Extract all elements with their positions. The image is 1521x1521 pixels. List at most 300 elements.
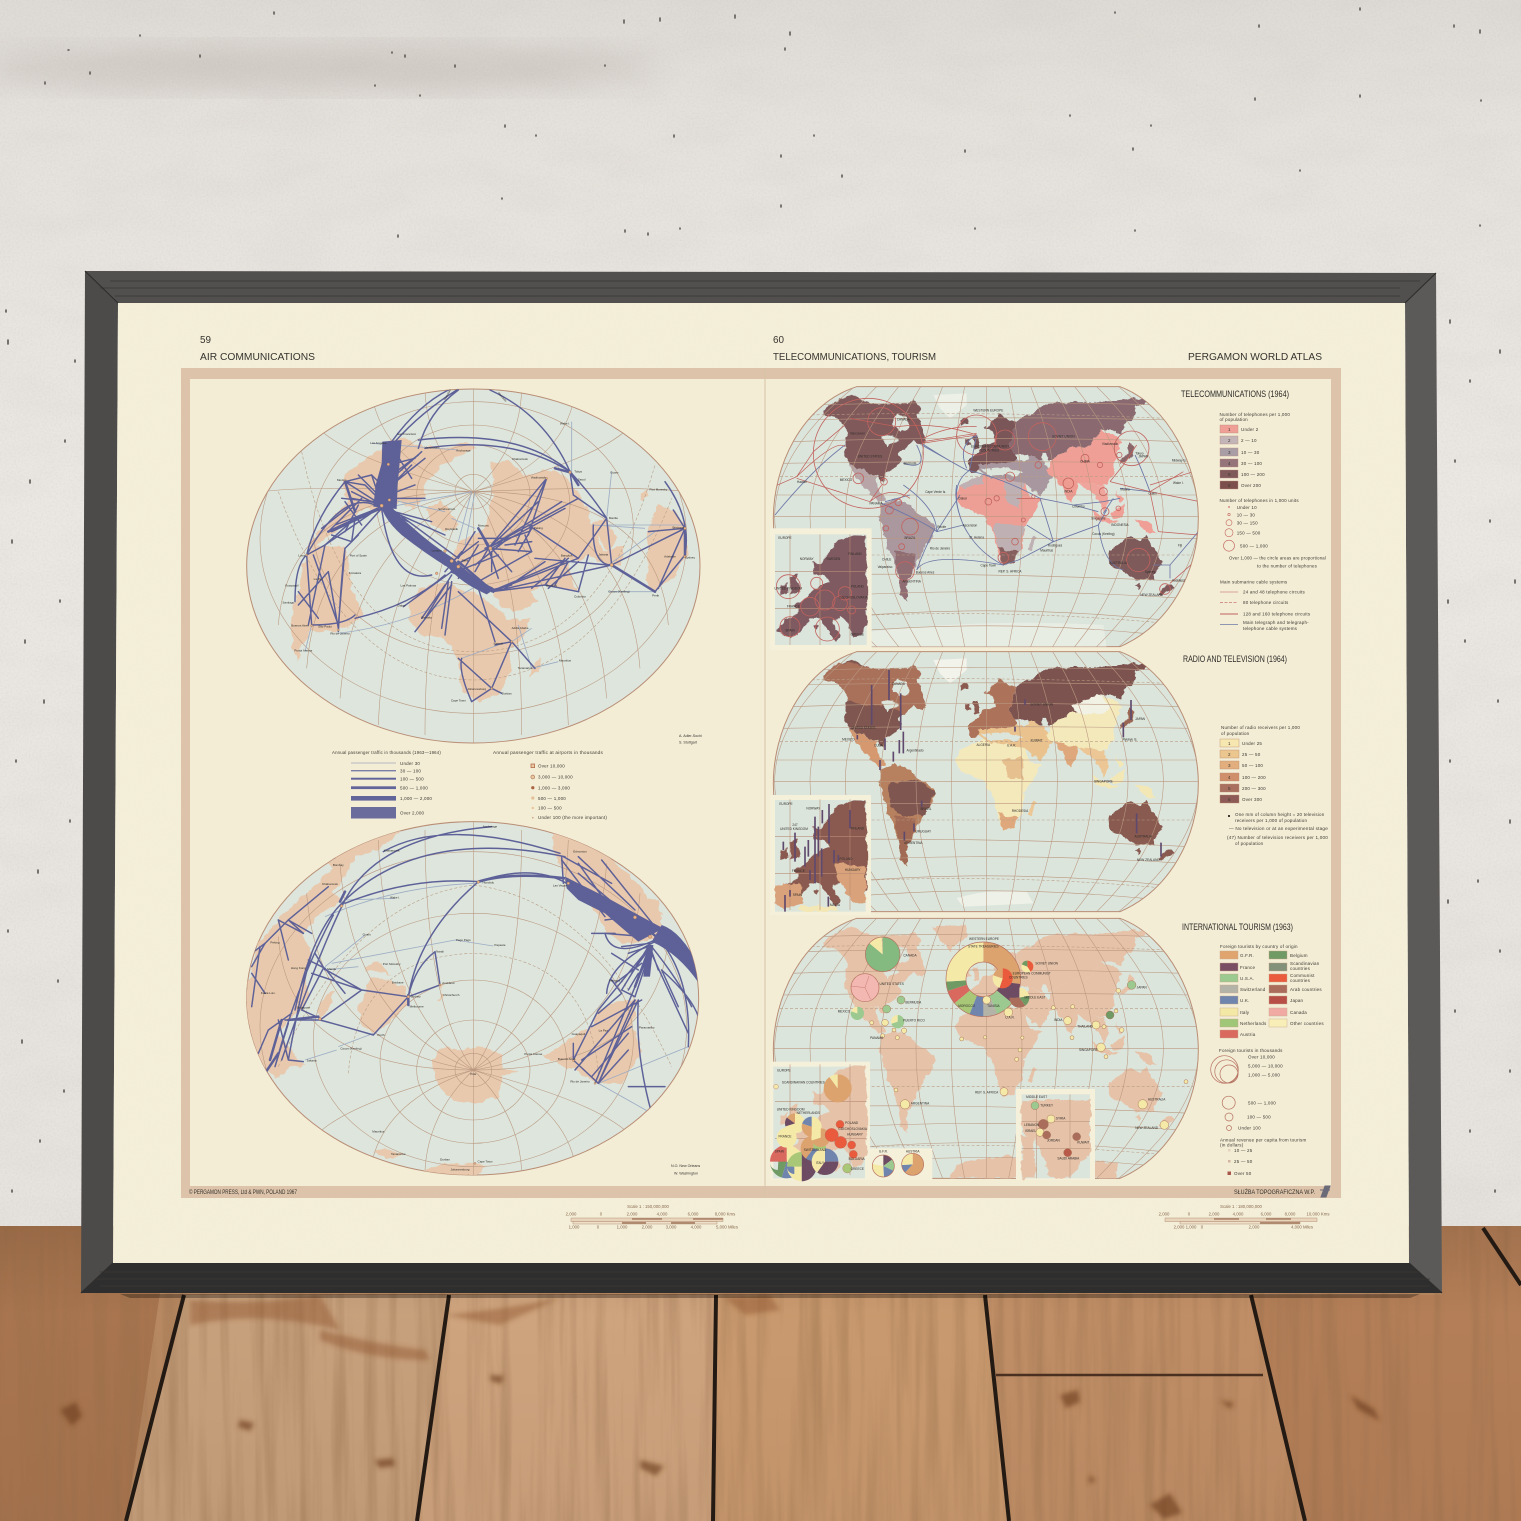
map labels: tourism: PANAMA (870, 1036, 884, 1040)
scale bar: right: 4,000 Miles (1291, 1224, 1313, 1230)
legend: airport traffic (493, 750, 607, 820)
map labels: telecommunications: Sydney (1145, 570, 1156, 574)
city labels: northern map: Mauritius (559, 659, 572, 663)
city labels: northern map: Anchorage (456, 449, 471, 453)
map labels: telecommunications: CHINA (1080, 460, 1091, 464)
city labels: northern map: Mexico (337, 478, 347, 482)
map labels: tourism: TUNISIA (987, 1004, 1000, 1008)
city labels: northern map (282, 388, 695, 703)
scale bar: right: 10,000 Kms (1307, 1212, 1329, 1216)
city labels: southern map: Tananarive (391, 1152, 406, 1156)
legend: international tourism: Switzerland (1240, 987, 1266, 992)
map labels: telecommunications: Recife (937, 525, 946, 529)
map: air routes, northern hemisphere (247, 363, 700, 743)
city labels: northern map: San Francisco (397, 432, 417, 436)
legend: telecommunications: 24 and 48 telephone circuits (1243, 590, 1305, 594)
city labels: northern map: Vladivostok (531, 475, 546, 479)
inset: Europe telephones: FRANCE (787, 605, 800, 609)
legend: international tourism: Under 100 (1238, 1126, 1261, 1130)
map labels: telecommunications: Vladivostok (1102, 442, 1118, 446)
map labels: telecommunications: Valparaíso (878, 565, 893, 569)
pie: United States (851, 974, 879, 1002)
map labels: telecommunications: NEW ZEALAND (1140, 593, 1164, 597)
city labels: northern map: Peking (534, 526, 543, 530)
city labels: northern map: Santiago (282, 600, 295, 604)
legend: international tourism: countries (1290, 978, 1311, 983)
map labels: telecommunications: Manila (1120, 488, 1130, 492)
legend: radio and television: 50 — 100 (1242, 763, 1263, 768)
legend: radio and television: 100 — 200 (1242, 775, 1266, 780)
legend: international tourism: Arab countries (1290, 987, 1322, 992)
city labels: southern map: Honolulu (482, 880, 495, 884)
scale bar: right: 8,000 (1285, 1212, 1296, 1216)
legend: telecommunications: 10 — 30 (1241, 450, 1260, 455)
city labels: southern map: Cape Town (478, 1160, 493, 1164)
map labels: telecommunications: COUNTRIES (981, 448, 999, 452)
inset: Middle East tourism: TURKEY (1040, 1103, 1054, 1107)
inset: Europe telephones: NORWAY (800, 557, 814, 561)
land: radio receiver density (822, 662, 1175, 867)
scale bar: left (566, 1204, 738, 1230)
map labels: telecommunications: EUROPEAN COMMUNIST (971, 445, 1009, 449)
city labels: southern map (261, 824, 655, 1172)
inset: Europe tourism: GREECE (851, 1167, 864, 1171)
legend: international tourism: G.F.R. (1240, 953, 1254, 958)
donut: Western Europe (956, 952, 1011, 1007)
inset: Europe radio: MALTA (830, 903, 841, 907)
map labels: telecommunications: SOVIET UNION (1052, 435, 1075, 439)
map labels: telecommunications: PANAMA (869, 502, 883, 506)
city labels: northern map: Guayaquil (285, 584, 299, 588)
legend: international tourism: France (1240, 965, 1256, 970)
legend: international tourism: Austria (1240, 1032, 1256, 1037)
legend: international tourism: Foreign tourists by country of origin (1220, 944, 1298, 949)
land: southern map (245, 823, 665, 1176)
city labels: northern map: São Paulo (318, 624, 332, 628)
scale bar: right: 6,000 (1261, 1212, 1272, 1216)
inset: Middle East tourism (1016, 1089, 1095, 1180)
inset: Europe telephones: FINLAND (848, 552, 862, 556)
map: radio and television (770, 652, 1199, 915)
inset: Europe tourism: SPAIN (775, 1149, 785, 1153)
legend: international tourism: Canada (1290, 1010, 1307, 1015)
city labels: southern map: Durban (440, 1158, 450, 1162)
legend: airport traffic: 3,000 — 10,000 (538, 774, 573, 780)
city labels: southern map: Khabarovsk (384, 849, 400, 853)
legend: international tourism: Over 50 (1234, 1171, 1252, 1176)
legend: airport traffic: Annual passenger traffic at airports in thousands (493, 750, 604, 755)
legend: telecommunications (1181, 389, 1326, 631)
map labels: tourism: MOROCCO (958, 1004, 976, 1008)
city labels: southern map: Edmonton (573, 850, 587, 854)
legend: international tourism (1182, 922, 1324, 1176)
scale bar: right: 2,000 (1209, 1212, 1220, 1216)
inset: Middle East tourism: SYRIA (1056, 1117, 1066, 1121)
air route credits: A. Adler-Sochi (679, 734, 702, 738)
legend: international tourism: 100 — 500 (1247, 1114, 1271, 1120)
city labels: northern map: Rio de Janeiro (330, 631, 350, 635)
scale bar: left: 5,000 Miles (716, 1224, 738, 1230)
city labels: southern map: Singapore (297, 1005, 310, 1009)
inset: Europe tourism: BULGARIA (849, 1157, 866, 1161)
legend: radio and television (1183, 654, 1328, 846)
land: northern map (290, 437, 688, 702)
city labels: northern map: Sondrestrom (438, 507, 456, 511)
city labels: northern map: Tananarive (518, 666, 533, 670)
inset: Europe tourism: ITALY (816, 1161, 825, 1165)
map labels: radio: KUWAIT (1031, 739, 1043, 743)
map labels: tourism: STATE TREASURIES (968, 944, 999, 948)
map labels: tourism: ARGENTINA (911, 1101, 930, 1105)
map labels: tourism: INDIA (1054, 1018, 1063, 1022)
legend: international tourism: Other countries (1290, 1021, 1324, 1026)
city labels: northern map: Moscow (478, 524, 490, 528)
inset: Europe telephones: CZECHOSLOVAKIA (839, 595, 869, 599)
inset: Europe tourism: POLAND (845, 1121, 859, 1125)
scale bar: left: 8,000 Kms (715, 1212, 735, 1216)
inset: Europe telephones: GREECE (851, 633, 864, 637)
legend: air passenger traffic: Under 30 (400, 761, 420, 766)
legend: telecommunications: Over 200 (1241, 483, 1261, 488)
inset: Europe radio: POLAND (840, 857, 853, 861)
map labels: telecommunications: St. Helena (969, 535, 984, 539)
inset: G.F.R. and Austria pies: AUSTRIA (906, 1150, 920, 1154)
legend: radio and television: 200 — 300 (1242, 786, 1266, 791)
map labels: tourism: COUNTRIES (1009, 975, 1028, 979)
city labels: southern map: Hong Kong (291, 966, 306, 970)
legend: air passenger traffic: 100 — 500 (400, 776, 424, 782)
inset: Europe radio (770, 795, 871, 915)
city labels: northern map: Guam (610, 470, 619, 474)
television columns (857, 670, 1161, 857)
city labels: northern map: Seoul (578, 478, 586, 482)
map labels: telecommunications: CHILE (882, 558, 891, 562)
legend: telecommunications: Over 1,000 — the circle areas are proportional (1229, 556, 1326, 560)
inset: Europe tourism: SCANDINAVIAN COUNTRIES (782, 1080, 825, 1084)
scale bar: left: 6,000 (688, 1212, 699, 1216)
city labels: southern map: Auckland (442, 981, 455, 985)
map: international tourism (770, 918, 1199, 1180)
legend: radio and television: 6 (1228, 797, 1231, 802)
city labels: southern map: Nandi (436, 950, 444, 954)
city labels: northern map: Nairobi (494, 641, 503, 645)
map labels: telecommunications: UNITED STATES (858, 455, 882, 459)
scale bar: left: 1,000 (569, 1224, 580, 1230)
inset: G.F.R. and Austria pies: G.F.R. (879, 1150, 888, 1154)
graticule: southern map (260, 822, 687, 1202)
map labels: radio: U.A.R. (1007, 744, 1016, 748)
map labels: telecommunications: ARGENTINA (902, 580, 922, 584)
legend: telecommunications: 150 — 500 (1237, 530, 1261, 536)
legend: international tourism: countries (1290, 966, 1311, 971)
land: tourism base (822, 925, 1175, 1178)
wooden floor (0, 1226, 1521, 1521)
map labels: telecommunications: Wake I. (1173, 481, 1184, 485)
legend: air passenger traffic: 30 — 100 (400, 768, 421, 774)
map labels: telecommunications: Buenos Aires (916, 570, 935, 574)
inset: Europe telephones: SWEDEN (826, 557, 841, 561)
legend: international tourism: U.K. (1240, 998, 1250, 1003)
legend: airport traffic: 1,000 — 3,000 (538, 786, 570, 790)
legend: radio and television: — No television or at an experimental stage (1229, 826, 1328, 831)
city labels: northern map: Buenos Aires (291, 624, 309, 628)
map labels: telecommunications: JAPAN (1138, 455, 1149, 459)
legend: airport traffic: 500 — 1,000 (538, 796, 566, 801)
legend: air passenger traffic (332, 750, 441, 818)
city labels: northern map: Bombay (546, 584, 558, 588)
inset: Europe tourism: SWITZERLAND (804, 1148, 827, 1152)
inset: Europe radio: 247 (792, 823, 798, 827)
map labels: telecommunications: Ascension (963, 524, 978, 528)
map labels: tourism: AUSTRALIA (1148, 1097, 1166, 1101)
band footer: publisher: © PERGAMON PRESS, Ltd & PWN, POLAND 1967 (189, 1188, 297, 1196)
city labels: southern map: Punta Arenas (524, 1052, 543, 1056)
air route credits lower (671, 1164, 700, 1176)
scale bar: left: 2,000 (566, 1212, 577, 1216)
legend: air passenger traffic: 500 — 1,000 (400, 786, 428, 790)
legend: radio and television: One mm of column height = 20 television (1235, 812, 1325, 817)
legend: telecommunications: 6 (1228, 483, 1231, 488)
picture frame (81, 271, 1442, 1298)
scale bar: right: 0 (1188, 1212, 1191, 1216)
map labels: telecommunications: Fiji (1178, 544, 1182, 548)
map: telecommunications (770, 387, 1200, 650)
inset: Europe tourism: HUNGARY (847, 1133, 864, 1137)
city labels: northern map: Manila (609, 516, 618, 520)
map labels: tourism: SINGAPORE (1079, 1048, 1098, 1052)
map labels: tourism: REP. S. AFRICA (975, 1091, 999, 1095)
legend: international tourism: 5,000 — 10,000 (1248, 1064, 1283, 1068)
inset: Europe radio: EUROPE (779, 802, 793, 806)
inset: Middle East tourism: JORDAN (1047, 1139, 1061, 1143)
page header: plate 59: AIR COMMUNICATIONS (200, 352, 315, 363)
map labels: telecommunications: Cape Verde Is. (925, 490, 946, 494)
inset: Europe telephones: POLAND (851, 585, 865, 589)
inset: Europe tourism: EUROPE (777, 1069, 791, 1073)
city labels: northern map: Wake I. (560, 421, 570, 425)
map labels: tourism: MIDDLE EAST (1024, 995, 1046, 999)
map labels: telecommunications: INDONESIA (1111, 523, 1130, 527)
legend: telecommunications: 2 (1228, 438, 1231, 443)
legend: international tourism: Foreign tourists in thousands (1219, 1048, 1283, 1053)
scale bar: left: 2,000 (642, 1224, 653, 1230)
legend: international tourism: Scandinavian (1290, 961, 1320, 966)
map labels: telecommunications: BRAZIL (904, 536, 916, 540)
legend: air passenger traffic: Over 2,000 (400, 810, 425, 816)
air route credits: S. Stuttgart (679, 740, 697, 744)
map labels: telecommunications: CANADA (897, 418, 911, 422)
pie: Canada (865, 937, 900, 972)
legend: telecommunications: to the number of telephones (1257, 564, 1318, 568)
city labels: southern map: Pago Pago (456, 938, 471, 942)
map labels: telecommunications: Bermuda (904, 461, 917, 465)
inset: Middle East tourism: KUWAIT (1077, 1141, 1089, 1145)
city labels: northern map: London (432, 549, 442, 553)
map labels: telecommunications: Hawaii (797, 480, 807, 484)
map labels: telecommunications: INDIA (1064, 490, 1073, 494)
inset: Europe radio: FRANCE (792, 869, 805, 873)
legend: radio and television: 25 — 50 (1242, 752, 1261, 757)
map labels: telecommunications: Mauritius (1040, 548, 1053, 552)
submarine cables (770, 418, 1200, 583)
legend: radio and television: 1 (1228, 741, 1231, 746)
legend: telecommunications: 3 (1228, 450, 1231, 455)
legend: telecommunications: telephone cable systems (1243, 626, 1298, 631)
legend: airport traffic: Over 10,000 (538, 764, 565, 768)
scale bar: right: 1,000 (1186, 1224, 1197, 1230)
map labels: radio: ALGERIA (976, 743, 991, 747)
legend: telecommunications: 1 (1228, 427, 1231, 432)
city labels: southern map: Brisbane (392, 980, 404, 984)
legend: telecommunications: Under 2 (1241, 427, 1259, 432)
city labels: northern map: Fortaleza (349, 571, 362, 575)
legend: telecommunications: 4 (1228, 461, 1231, 466)
legend: international tourism: INTERNATIONAL TOURISM (1963) (1182, 922, 1293, 932)
city labels: northern map: Bangkok (561, 554, 573, 558)
city labels: northern map: Cape Town (451, 699, 466, 703)
city labels: northern map: Perth (652, 594, 660, 598)
legend: radio and television: Under 25 (1242, 741, 1262, 746)
legend: telecommunications: Main telegraph and telegraph- (1243, 620, 1309, 625)
map labels: telecommunications (797, 409, 1187, 597)
city labels: northern map: Reykjavik (445, 527, 459, 531)
city labels: northern map: Punta Arenas (294, 649, 313, 653)
legend: telecommunications: Number of telephones per 1,000 (1220, 412, 1290, 417)
legend: radio and television: RADIO AND TELEVISION (1964) (1183, 654, 1287, 664)
inset: Europe tourism: CZECHOSLOVAKIA (838, 1127, 868, 1131)
map labels: radio: AUSTRALIA (1135, 834, 1153, 838)
map labels: telecommunications: Dakar (958, 497, 967, 501)
inset: Europe telephones: EUROPE (778, 536, 792, 540)
inset: Europe radio: HUNGARY (845, 868, 861, 872)
legend: telecommunications: of population (1220, 417, 1248, 422)
city labels: northern map: Khabarovsk (512, 457, 528, 461)
scale bar: left: 4,000 (691, 1224, 702, 1230)
legend: international tourism: Italy (1240, 1010, 1250, 1015)
legend: international tourism: Over 10,000 (1248, 1054, 1275, 1060)
scale bar: right: 2,000 (1249, 1224, 1260, 1230)
map labels: telecommunications: Colombo (1072, 505, 1085, 509)
map labels: telecommunications: Rodrigues (1048, 543, 1063, 547)
city labels: northern map: Port Moresby (649, 488, 668, 492)
city labels: northern map: Vancouver (425, 445, 439, 449)
airports: southern map (319, 881, 652, 1164)
legend: radio and television: receivers per 1,000 of population (1235, 818, 1307, 823)
city labels: northern map: Sydney (685, 555, 695, 559)
inset: Europe telephones (770, 528, 872, 650)
legend: telecommunications: 30 — 150 (1237, 520, 1258, 526)
map labels: radio: MEXICO (842, 738, 855, 742)
scale bar: left: 3,000 (666, 1224, 677, 1230)
legend: telecommunications: Number of telephones in 1,000 units (1220, 498, 1299, 503)
map labels: radio: SOVIET UNION (1030, 703, 1054, 707)
legend: radio and television: 4 (1228, 775, 1231, 780)
legend: radio and television: Number of radio receivers per 1,000 (1221, 725, 1300, 730)
city labels: northern map: Adelaide (664, 554, 676, 558)
city labels: northern map: Johannesburg (467, 687, 486, 691)
map labels: radio (842, 682, 1160, 862)
air route credits lower: W. Washington (674, 1172, 698, 1176)
map labels: tourism: THAILAND (1077, 1025, 1094, 1029)
inset: Europe radio: NORWAY (806, 806, 821, 810)
map labels: telecommunications: Auckland (1172, 578, 1185, 582)
legend: international tourism: 1,000 — 5,000 (1248, 1072, 1280, 1078)
inset: Europe tourism: UNITED KINGDOM (777, 1107, 805, 1111)
legend: international tourism: U.S.A. (1240, 976, 1254, 981)
land: telephone density (822, 397, 1175, 602)
city labels: southern map: Paramaribo (639, 1025, 655, 1029)
scale bar: left: 2,000 (627, 1212, 638, 1216)
city labels: southern map: Guayaquil (572, 1032, 585, 1036)
map labels: radio: NEW ZEALAND (1137, 858, 1160, 862)
scale bar: right: 0 (1201, 1224, 1204, 1230)
map labels: radio: ARGENTINA (904, 841, 923, 845)
map labels: tourism: SOVIET UNION (1035, 961, 1059, 965)
legend: radio and television: 2 (1228, 752, 1231, 757)
map labels: telecommunications: AUSTRALIA (1110, 561, 1128, 565)
legend: telecommunications: 80 telephone circuits (1243, 600, 1289, 605)
city labels: northern map: Lima (298, 554, 305, 558)
map labels: telecommunications: Guam (1148, 491, 1157, 495)
inset: Middle East tourism: SAUDI ARABIA (1057, 1156, 1080, 1160)
city labels: southern map: Johannesburg (451, 1168, 470, 1172)
legend: telecommunications: 500 — 1,000 (1240, 544, 1268, 548)
city labels: southern map: Christchurch (443, 993, 460, 997)
city labels: southern map: Las Vegas (553, 884, 567, 888)
city labels: southern map: Mauritius (372, 1130, 385, 1134)
city labels: northern map: Brisbane (672, 525, 685, 529)
map labels: tourism: PUERTO RICO (903, 1019, 925, 1023)
legend: radio and television: Over 300 (1242, 797, 1262, 802)
map labels: radio: Argentinado (906, 749, 924, 753)
air route credits lower: N.O. New Orleans (671, 1164, 700, 1168)
graticule: northern map (260, 363, 687, 743)
map labels: radio: CUBA (874, 744, 884, 748)
map labels: telecommunications: MEXICO (840, 478, 853, 482)
city labels: northern map: Las Palmas (401, 584, 417, 588)
legend: radio and television: 3 (1228, 763, 1231, 768)
city labels: northern map: Tokyo (574, 469, 583, 473)
scale bar: left: 1,000 (617, 1224, 628, 1230)
city labels: southern map: Rio de Janeiro (570, 1079, 590, 1083)
inset: Middle East tourism: ISRAEL (1025, 1129, 1037, 1133)
legend: telecommunications: 2 — 10 (1241, 438, 1257, 443)
legend: telecommunications: 10 — 30 (1237, 512, 1255, 518)
city labels: northern map: Addis Ababa (512, 626, 529, 630)
map labels: tourism (838, 937, 1166, 1130)
page header: plate 60 (773, 335, 936, 363)
map labels: tourism: BERMUDA (905, 1001, 922, 1005)
page header: plate 59: 59 (200, 335, 211, 346)
scale bar: left: Scale 1 : 150,000,000 (627, 1204, 670, 1209)
city labels: southern map: Buenos Aires (558, 1057, 576, 1061)
scale bar: right (1159, 1204, 1329, 1230)
scale bar: right: 2,000 (1159, 1212, 1170, 1216)
map labels: tourism: JAPAN (1137, 985, 1147, 989)
map labels: tourism: UNITED STATES (879, 982, 904, 986)
page header: plate 60: 60 (773, 335, 784, 346)
map labels: tourism: NEW ZEALAND (1135, 1126, 1159, 1130)
atlas title: PERGAMON WORLD ATLAS (1188, 352, 1322, 363)
map labels: telecommunications: REP. S. AFRICA (998, 569, 1022, 573)
inset: G.F.R. and Austria pies (870, 1148, 932, 1180)
city labels: southern map: Melbourne (410, 1005, 424, 1009)
legend: air passenger traffic: 1,000 — 2,000 (400, 796, 432, 801)
map labels: tourism: EUROPEAN COMMUNIST (1013, 971, 1051, 975)
inset: Middle East tourism: MIDDLE EAST (1026, 1095, 1047, 1099)
map labels: tourism: WESTERN EUROPE (969, 937, 999, 941)
legend: international tourism: Communist (1290, 973, 1315, 978)
